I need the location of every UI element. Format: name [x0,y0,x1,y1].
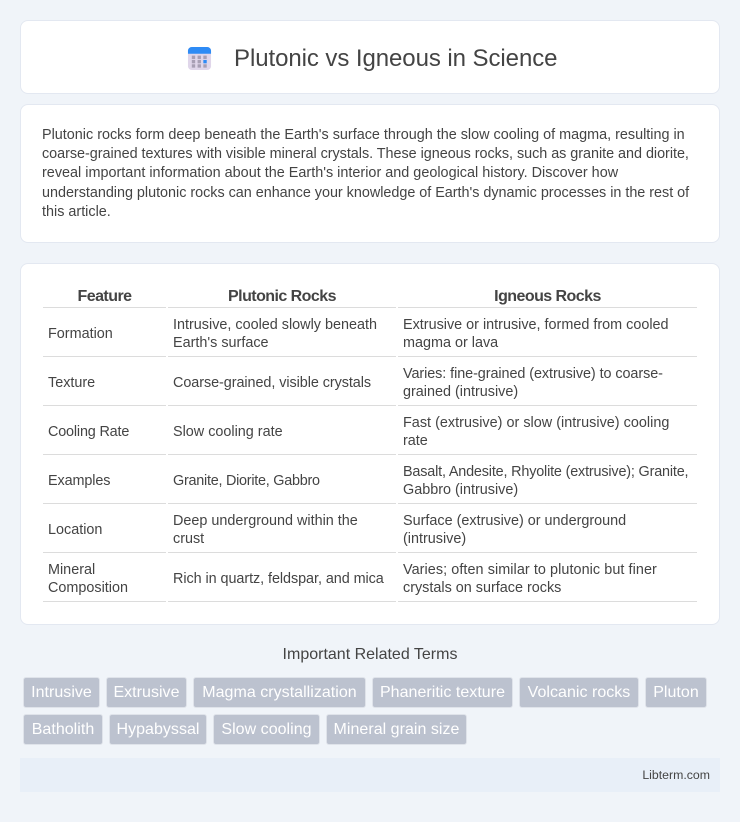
comparison table panel: Location [48,522,102,538]
comparison table panel: magma or lava [403,335,498,351]
comparison table panel: Deep underground within the [173,513,358,529]
comparison table panel: Surface (extrusive) or underground [403,513,626,529]
comparison table panel: Extrusive or intrusive, formed from cooled [403,317,669,333]
related terms tags: Magma crystallization [202,684,357,701]
related terms heading: Important Related Terms [283,646,457,663]
comparison table panel: Fast (extrusive) or slow (intrusive) cooling [403,415,669,431]
related terms tags: Intrusive [31,684,92,701]
comparison table panel: rate [403,433,428,449]
comparison table panel: Coarse-grained, visible crystals [173,375,371,391]
comparison table panel: Basalt, Andesite, Rhyolite (extrusive); Granite, [403,464,688,480]
comparison table panel: Igneous Rocks [494,288,601,305]
icon: calendar [188,47,212,70]
intro panel [20,104,720,243]
comparison table panel: Formation [48,326,113,342]
comparison table panel: Cooling Rate [48,424,129,440]
intro panel: reveal important information about the Earth's interior and geological history. Discover how [42,165,618,181]
related terms tags [23,677,707,745]
footer credit: Libterm.com [642,768,710,782]
related terms tags: Slow cooling [221,721,312,738]
related terms tags: Mineral grain size [334,721,459,738]
related terms tags: Volcanic rocks [528,684,630,701]
comparison table panel: Mineral [48,562,95,578]
related terms tags: Hypabyssal [116,721,200,738]
header card [20,20,720,94]
comparison table panel: crystals on surface rocks [403,580,561,596]
intro text [42,127,690,220]
comparison table panel: Rich in quartz, feldspar, and mica [173,571,384,587]
related terms tags: Extrusive [113,684,180,701]
comparison table panel: Earth's surface [173,335,269,351]
comparison table panel: Slow cooling rate [173,424,283,440]
comparison table panel: Plutonic Rocks [228,288,336,305]
comparison table panel: Granite, Diorite, Gabbro [173,473,320,489]
intro panel: Plutonic rocks form deep beneath the Earth's surface through the slow cooling of magma, resulting in [42,127,685,143]
footer [20,758,720,792]
comparison table panel: Varies: fine-grained (extrusive) to coarse- [403,366,663,382]
title: Plutonic vs Igneous in Science [234,45,557,72]
comparison table panel: Examples [48,473,110,489]
comparison table panel: Texture [48,375,95,391]
comparison table panel: Gabbro (intrusive) [403,482,518,498]
comparison table panel: Intrusive, cooled slowly beneath [173,317,377,333]
comparison table panel: Feature [78,288,131,305]
intro panel: understanding plutonic rocks can enhance your knowledge of Earth's dynamic processes in the rest of [42,185,689,201]
comparison table panel [20,263,720,625]
intro panel: coarse-grained textures with visible mineral crystals. These igneous rocks, such as granite and diorite, [42,146,689,162]
related terms tags: Pluton [653,684,699,701]
intro panel: this article. [42,204,111,220]
related terms tags: Batholith [32,721,94,738]
comparison table panel: grained (intrusive) [403,384,518,400]
related terms tags: Phaneritic texture [380,684,505,701]
comparison table panel: Composition [48,580,128,596]
comparison table panel: Varies; often similar to plutonic but finer [403,562,657,578]
comparison table panel: crust [173,531,204,547]
comparison table panel: (intrusive) [403,531,466,547]
table [43,288,697,602]
